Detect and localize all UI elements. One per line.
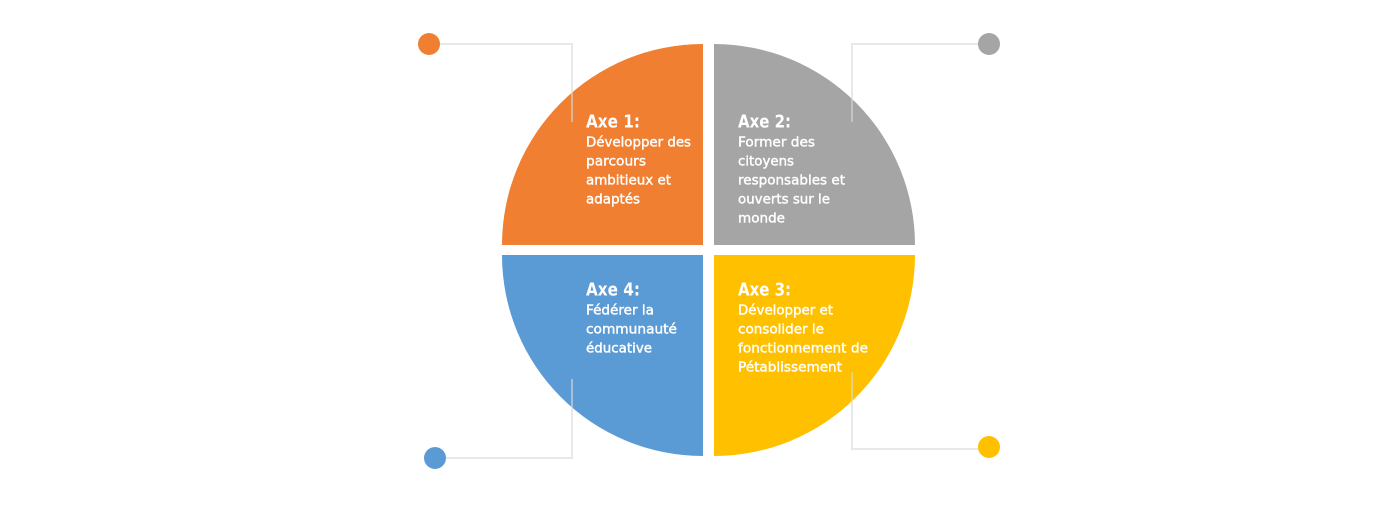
text block: axe 3: fonctionnement de (738, 340, 868, 356)
text block: axe 2: ouverts sur le (738, 192, 830, 208)
text block: axe 3: consolider le (738, 322, 824, 338)
text block: axe 1: adaptés (586, 192, 640, 208)
text block: axe 3: Axe 3: (738, 280, 791, 300)
text block: axe 4: communauté (586, 322, 677, 338)
icon: blue dot (424, 447, 446, 469)
text block: axe 4: Axe 4: (586, 280, 640, 300)
text block: axe 1: parcours (586, 154, 646, 170)
text block: axe 2: responsables et (738, 172, 845, 188)
text block: axe 1: ambitieux et (586, 172, 671, 188)
text block: axe 2 (738, 112, 845, 226)
connector: axe 2 (852, 44, 989, 122)
text block: axe 1 (586, 112, 691, 208)
panel: axe 4 quadrant (502, 255, 703, 456)
text block: axe 4: Fédérer la (586, 302, 654, 318)
text block: axe 2: citoyens (738, 154, 794, 170)
text block: axe 1: Axe 1: (586, 112, 640, 132)
text block: axe 2: Former des (738, 134, 815, 150)
text block: axe 1: Développer des (586, 134, 691, 150)
text block: axe 3: Pétablissement (738, 360, 842, 376)
text block: axe 3 (738, 280, 868, 376)
connector: axe 3 (852, 372, 989, 449)
icon: orange dot (418, 33, 440, 55)
text block: axe 4 (586, 280, 677, 356)
text block: axe 2: Axe 2: (738, 112, 791, 132)
panel: axe 1 quadrant (502, 44, 703, 245)
text block: axe 2: monde (738, 210, 785, 226)
icon: yellow dot (978, 436, 1000, 458)
text block: axe 4: éducative (586, 340, 652, 356)
connector: axe 4 (435, 379, 572, 458)
icon: grey dot (978, 33, 1000, 55)
panel: axe 3 quadrant (714, 255, 915, 456)
text block: axe 3: Développer et (738, 302, 833, 318)
connector: axe 1 (429, 44, 572, 122)
panel: axe 2 quadrant (714, 44, 915, 245)
